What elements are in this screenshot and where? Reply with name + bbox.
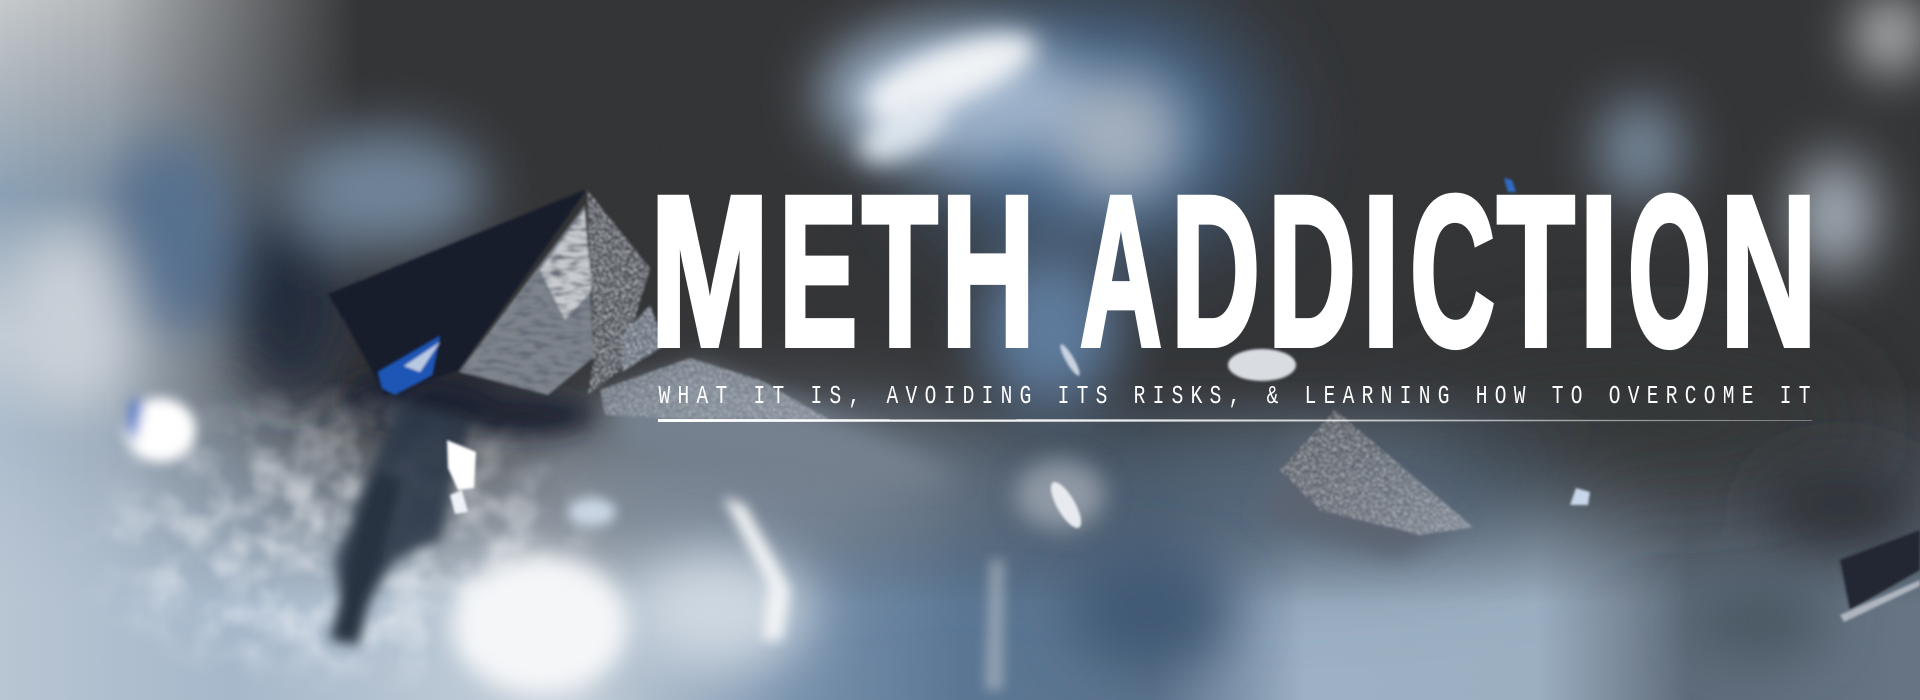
dark crystal facet (328, 189, 587, 395)
bottom light band (0, 380, 1920, 700)
mottled lower-left crystal cluster (110, 388, 590, 675)
left light column (0, 0, 344, 594)
divider rule under subtitle (658, 419, 1812, 422)
lit crystal facet (459, 205, 594, 395)
title (650, 180, 1817, 360)
blue refractions (378, 336, 440, 395)
crystal shards (124, 398, 1004, 690)
gritty pyramid (1280, 410, 1473, 535)
gritty mound edge (600, 358, 830, 420)
right facet (587, 190, 650, 395)
soft mound haze (610, 365, 960, 490)
